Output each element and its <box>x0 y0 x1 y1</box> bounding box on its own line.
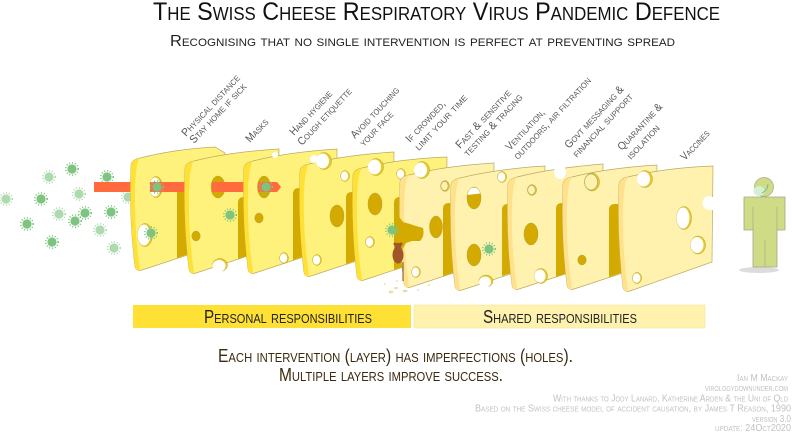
summary text: Each intervention (layer) has imperfections (holes). <box>218 346 573 366</box>
label: masks: Masks <box>243 116 271 145</box>
label: hand hygiene: Cough etiquette <box>295 86 355 148</box>
slice 6: fast testing <box>400 162 494 288</box>
slice 3: hand hygiene <box>244 149 337 274</box>
label: fast testing: testing & tracing <box>461 92 525 159</box>
intervention labels <box>179 72 712 163</box>
virus blocked by slices <box>145 181 272 239</box>
arrow head <box>258 182 281 192</box>
slice 9: quarantine <box>562 165 657 290</box>
label: avoid touching: your face <box>357 109 396 149</box>
label: physical distance: Physical distance <box>179 72 243 139</box>
slice 5: if crowded <box>352 157 447 280</box>
virus at testing slice <box>483 243 495 255</box>
slice 2: masks <box>184 149 279 274</box>
summary text <box>218 346 573 385</box>
personal responsibilities bar: Personal responsibilities <box>204 307 372 327</box>
slice 8: govt messaging <box>508 164 603 290</box>
arrow through slice 2 <box>212 182 252 192</box>
label: hand hygiene: Hand hygiene <box>287 88 335 138</box>
personal responsibilities bar <box>133 305 411 328</box>
shared responsibilities bar <box>414 305 705 328</box>
slice 4: avoid touching face <box>300 152 394 276</box>
label: vaccines: Vaccines <box>678 128 712 163</box>
white notch on slice 8 <box>554 165 566 179</box>
mouse bite <box>397 214 424 262</box>
subtitle: Recognising that no single intervention is perfect at preventing spread <box>170 33 675 50</box>
label: avoid touching: Avoid touching <box>348 85 402 141</box>
label: if crowded: If crowded, <box>403 98 448 145</box>
mouse <box>392 242 404 281</box>
summary text: Multiple layers improve success. <box>279 365 503 385</box>
label: quarantine: Quarantine & <box>615 101 666 153</box>
arrow tail <box>94 182 134 192</box>
slice 1: physical distance <box>130 147 225 270</box>
slice 7: ventilation <box>450 166 545 290</box>
label: govt messaging: financial support <box>570 91 636 160</box>
person wearing a mask <box>739 178 785 273</box>
label: if crowded: limit your time <box>412 92 470 153</box>
label: fast testing: Fast & sensitive <box>453 87 514 151</box>
virus in bite <box>386 224 398 236</box>
crumbs <box>384 280 430 293</box>
label: physical distance: Stay home if sick <box>187 80 250 146</box>
label: govt messaging: Govt messaging & <box>562 83 627 151</box>
shared responsibilities bar: Shared responsibilities <box>483 307 637 327</box>
label: ventilation: Ventilation, <box>503 107 548 153</box>
label: quarantine: isolation <box>624 122 663 162</box>
label: ventilation: outdoors, air filtration <box>511 75 594 162</box>
credits <box>475 373 791 432</box>
slice 10: vaccines <box>618 166 716 292</box>
arrow through slice 1 <box>150 182 190 192</box>
virus cloud <box>0 163 134 254</box>
